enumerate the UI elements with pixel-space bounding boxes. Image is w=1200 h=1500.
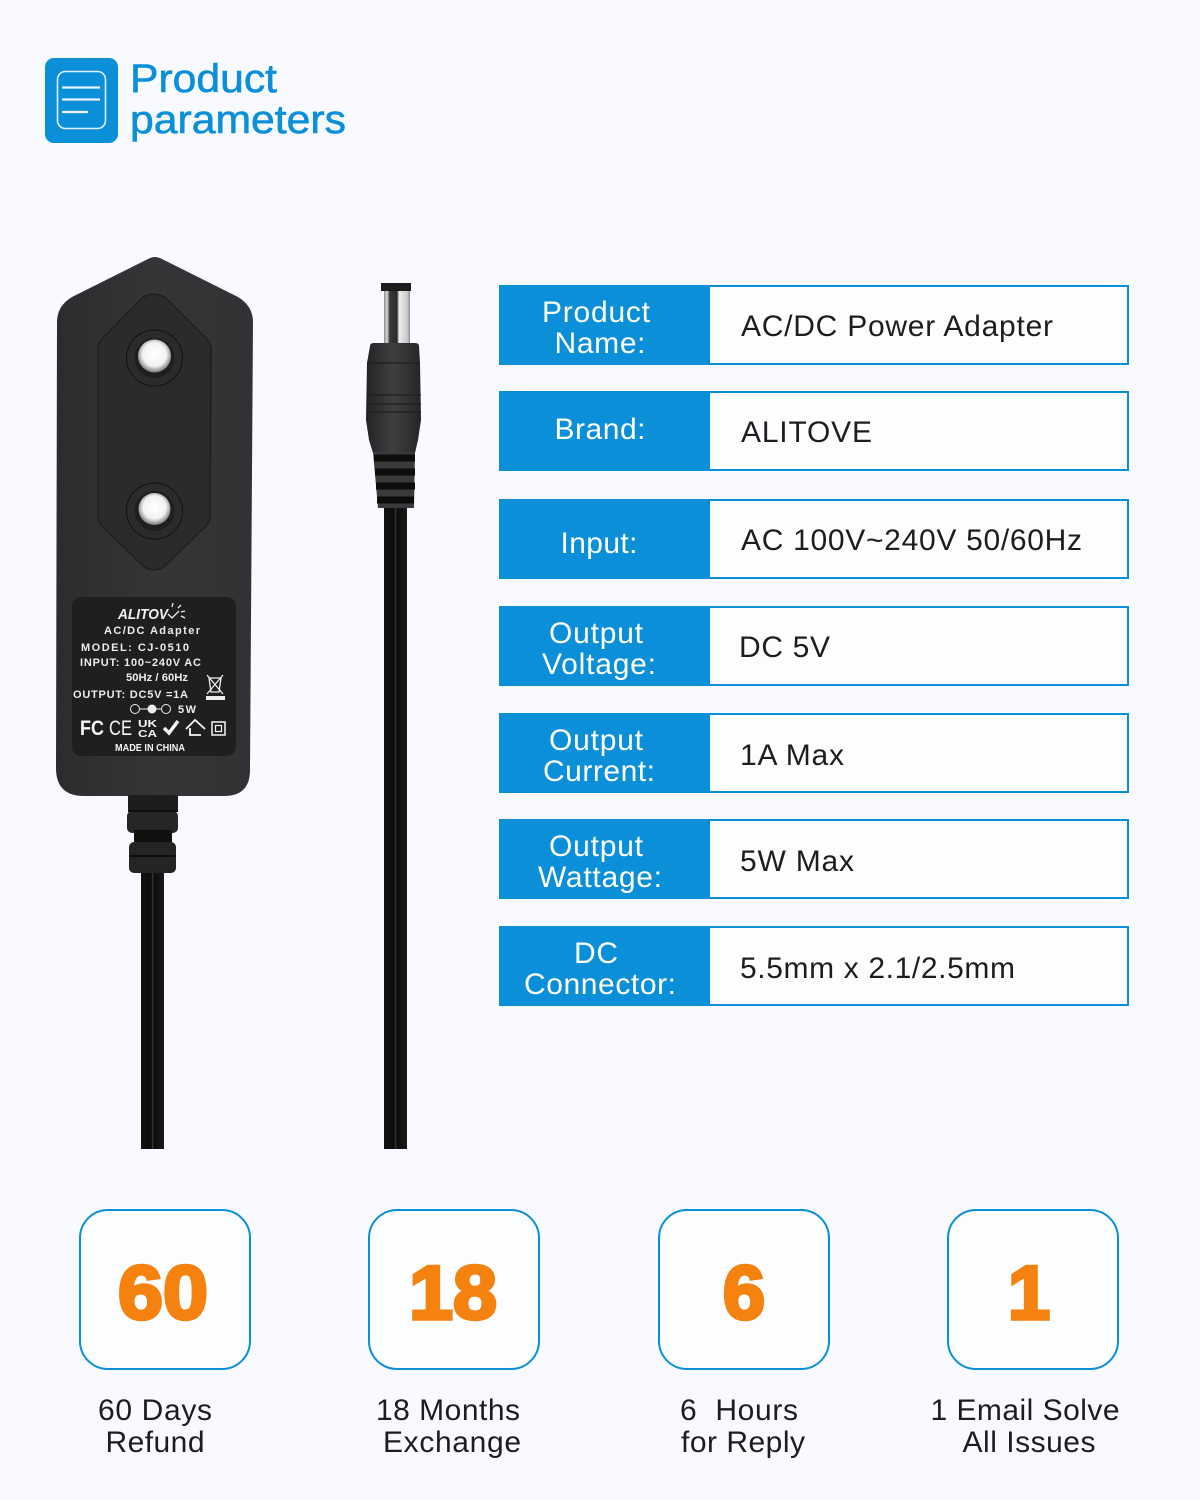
row: product name: Product (542, 296, 651, 329)
row: dc connector (499, 926, 1128, 1006)
row: product name: Name: (554, 327, 646, 360)
row: product name (499, 285, 1128, 365)
title: parameters (130, 98, 346, 142)
row: brand: Brand: (554, 413, 646, 446)
icon: document list (45, 58, 118, 143)
row: brand (499, 391, 1128, 471)
row: output wattage (499, 819, 1128, 899)
plug recess (98, 294, 211, 570)
row: output voltage: Voltage: (542, 648, 656, 681)
weee bin icon (207, 675, 223, 694)
dc connector (366, 283, 421, 1149)
badge: 60 days refund: Refund (106, 1426, 204, 1459)
row: input: Input: (560, 527, 638, 560)
badge: 6 hours for reply: 6 Hours (680, 1394, 798, 1427)
rating label: MODEL: CJ-0510 (81, 642, 189, 654)
row: input: AC 100V~240V 50/60Hz (741, 524, 1082, 557)
row: output wattage: 5W Max (740, 845, 854, 878)
badge: 6 hours for reply (659, 1210, 829, 1459)
rating label: 5W (178, 704, 197, 716)
badge: 18 months exchange (369, 1210, 539, 1459)
row: brand: ALITOVE (741, 416, 872, 449)
badge: 1 email solve all issues: 1 Email Solve (930, 1394, 1120, 1427)
badge: 60 days refund: 60 Days (98, 1394, 212, 1427)
badge: 18 months exchange: 18 (409, 1251, 497, 1336)
row: input (499, 499, 1128, 579)
certification marks: FC (80, 717, 104, 740)
row: product name: AC/DC Power Adapter (741, 310, 1053, 343)
pin bottom (126, 483, 182, 539)
row: output wattage: Wattage: (538, 861, 662, 894)
spec table (499, 285, 1128, 1006)
row: dc connector: 5.5mm x 2.1/2.5mm (740, 952, 1015, 985)
left cable (141, 873, 164, 1149)
adapter housing (56, 257, 253, 796)
right cable (384, 508, 407, 1149)
rating label: OUTPUT: DC5V =1A (73, 689, 188, 701)
plug grip (366, 343, 421, 453)
rating label: CA (138, 729, 157, 740)
row: output current: Output (549, 724, 644, 757)
ribbed boot (373, 452, 415, 508)
badge: 60 days refund: 60 (118, 1251, 208, 1336)
rating label: AC/DC Adapter (104, 625, 201, 637)
rating label: 50Hz / 60Hz (126, 672, 189, 684)
badge: 1 email solve all issues: 1 (1008, 1251, 1050, 1336)
polarity symbol (134, 708, 165, 710)
title (130, 57, 346, 142)
badge: 6 hours for reply: for Reply (681, 1426, 805, 1459)
badge: 1 email solve all issues: All Issues (962, 1426, 1096, 1459)
rating label (72, 597, 236, 756)
logo mark (168, 603, 185, 618)
badge: 18 months exchange: Exchange (383, 1426, 521, 1459)
pin top (126, 330, 182, 386)
row: dc connector: Connector: (524, 968, 676, 1001)
rating label: INPUT: 100~240V AC (80, 657, 201, 669)
metal barrel (384, 284, 410, 344)
badge: 1 email solve all issues (930, 1210, 1120, 1459)
row: output current (499, 713, 1128, 793)
rating label: ALITOV (117, 606, 170, 623)
title: Product (130, 57, 277, 101)
row: output current: 1A Max (740, 739, 844, 772)
row: output voltage: DC 5V (739, 631, 830, 664)
row: output wattage: Output (549, 830, 644, 863)
row: output voltage (499, 606, 1128, 686)
row: output current: Current: (543, 755, 655, 788)
row: output voltage: Output (549, 617, 644, 650)
badge: 60 days refund (80, 1210, 250, 1459)
rating label: CE (109, 717, 132, 740)
badge: 6 hours for reply: 6 (723, 1251, 765, 1336)
badge: 18 months exchange: 18 Months (376, 1394, 520, 1427)
strain relief (127, 795, 178, 873)
rating label: UK (138, 719, 158, 730)
rating label: MADE IN CHINA (115, 743, 185, 754)
row: dc connector: DC (574, 937, 618, 970)
power adapter body (56, 257, 253, 1149)
